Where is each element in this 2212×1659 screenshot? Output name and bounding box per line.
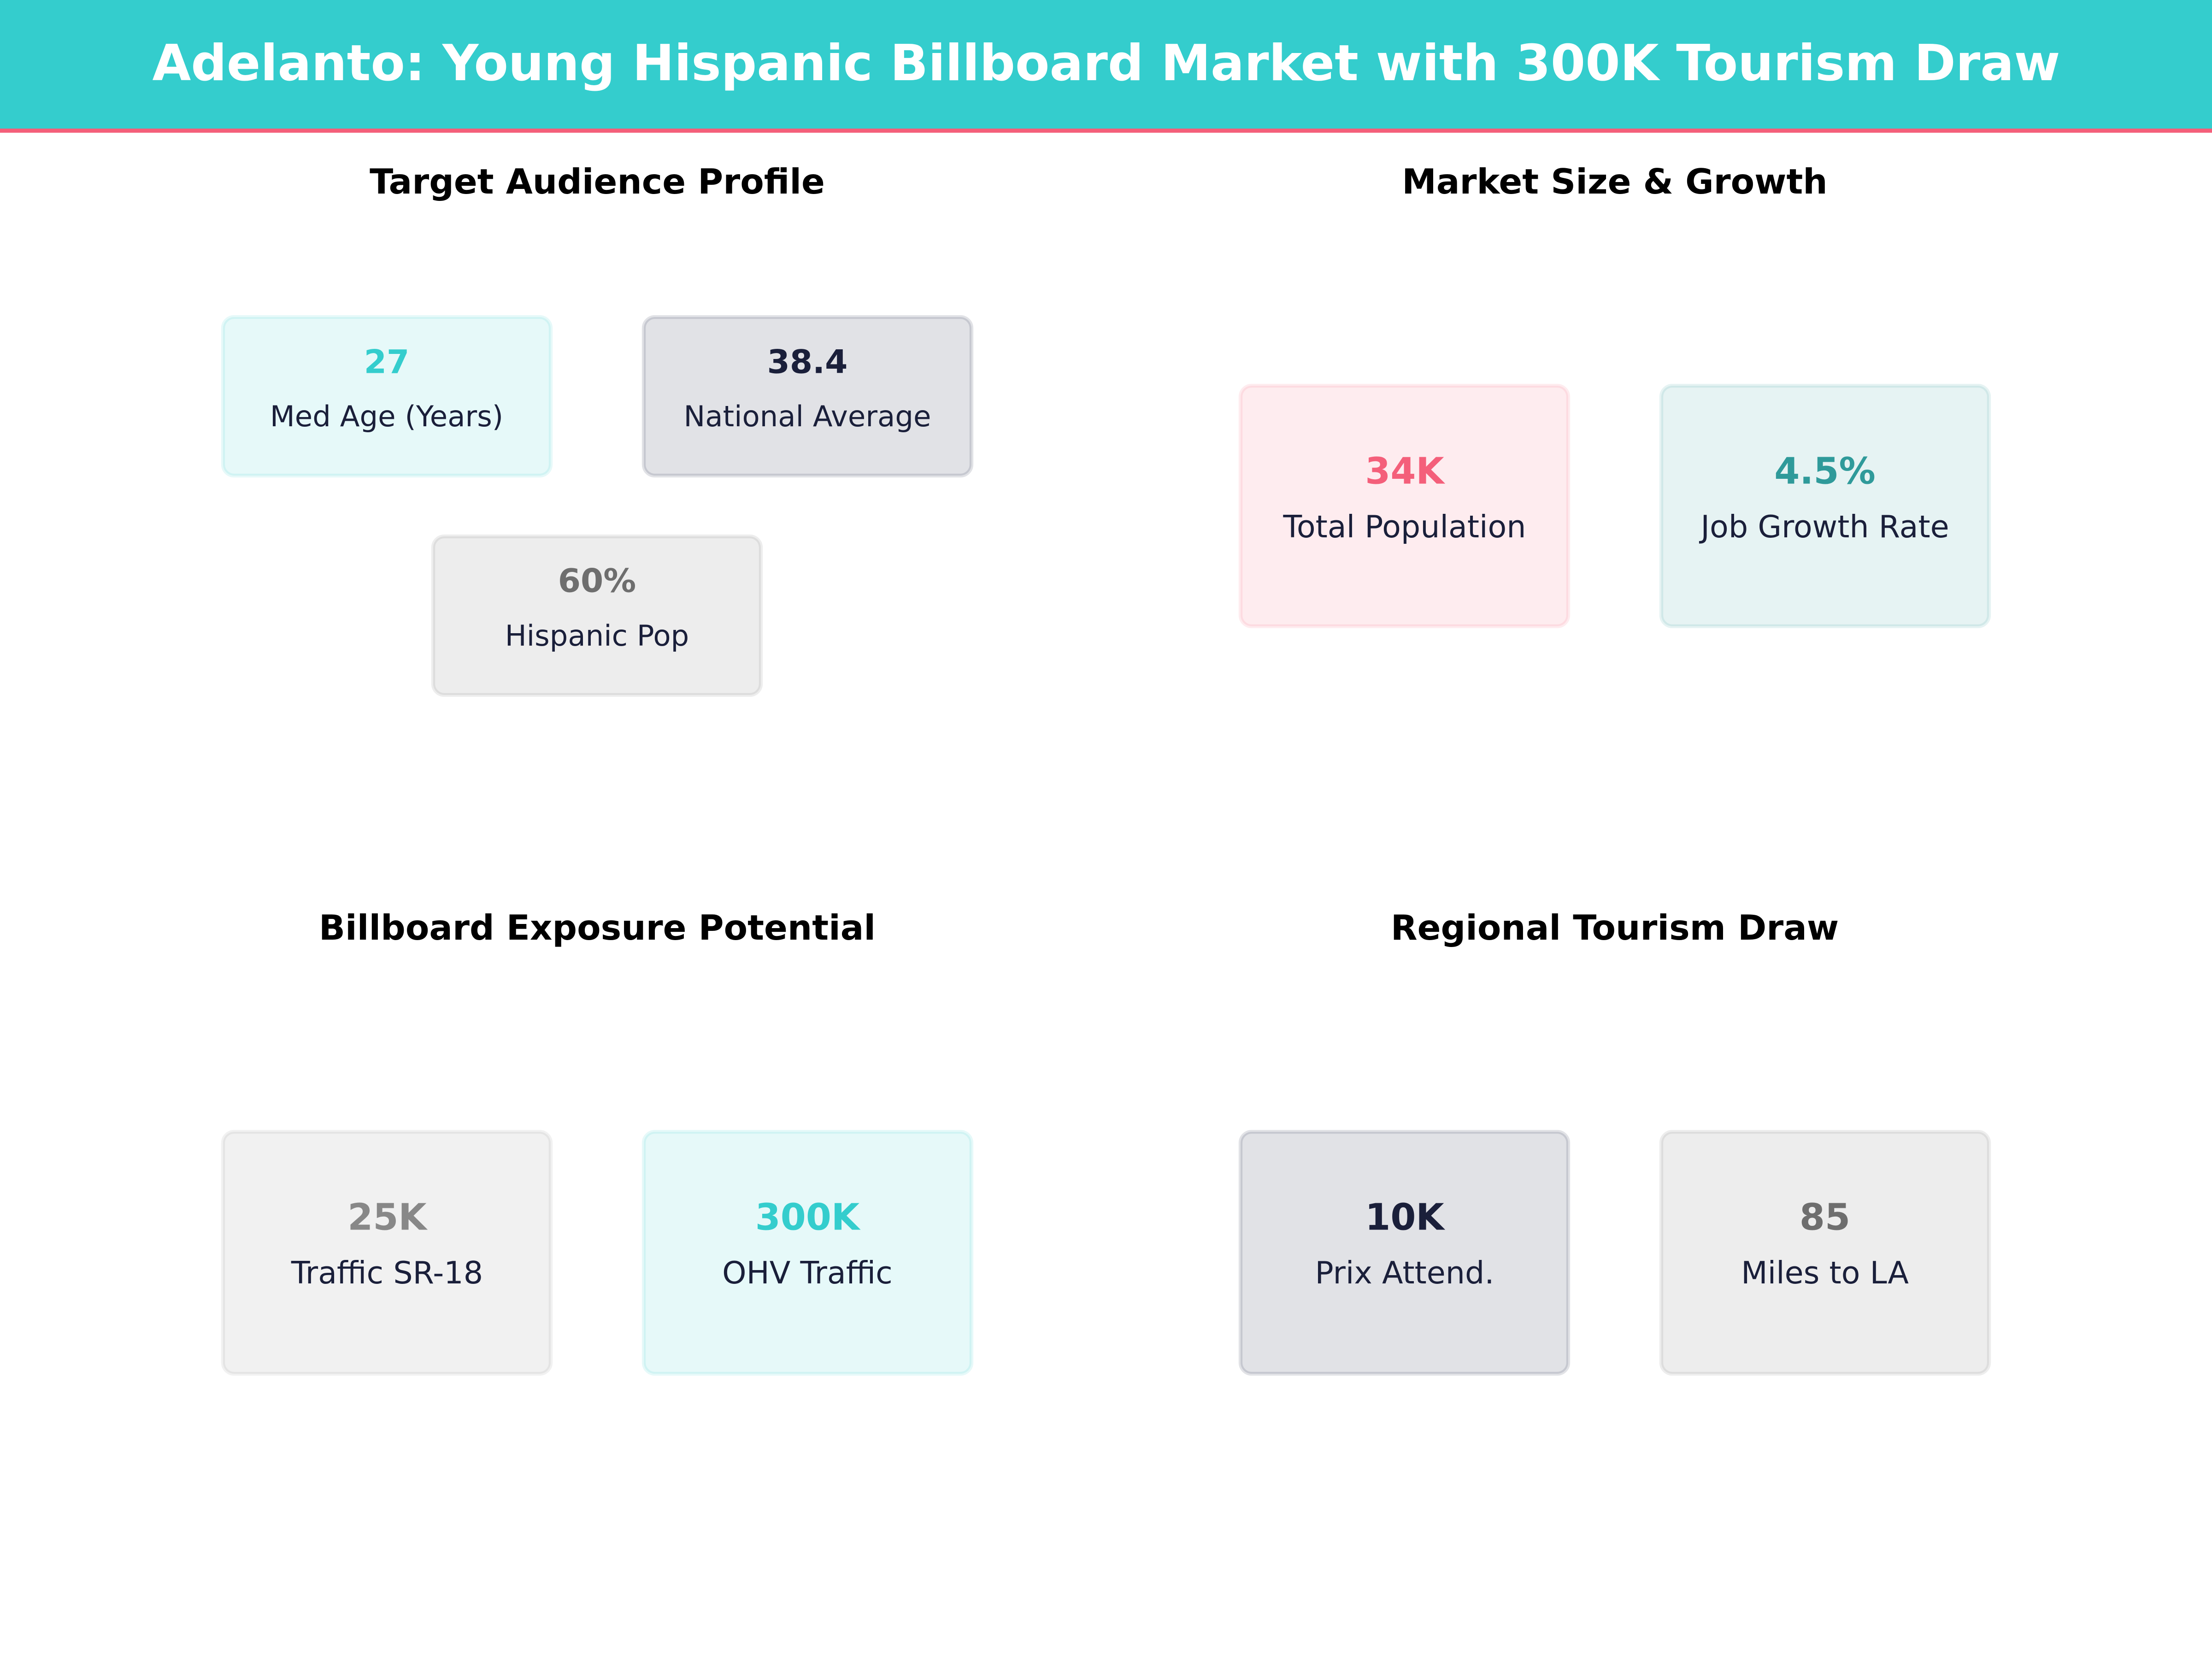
card: miles to LA (1661, 1132, 1989, 1374)
heading: target audience profile: Target Audience Profile (370, 161, 825, 202)
value: 300K (755, 1196, 861, 1239)
label: Job Growth Rate (1699, 509, 1949, 545)
card: prix attendance (1241, 1132, 1568, 1374)
panel: billboard exposure potential (223, 907, 971, 1374)
value: 60% (558, 561, 636, 600)
value: 34K (1365, 450, 1445, 492)
value: 27 (364, 343, 409, 381)
header banner (0, 0, 2212, 133)
heading: market size and growth: Market Size & Growth (1402, 161, 1828, 202)
card: national average (644, 317, 971, 476)
label: Hispanic Pop (505, 619, 689, 653)
label: Traffic SR-18 (291, 1255, 483, 1291)
label: Miles to LA (1741, 1255, 1909, 1291)
card: job growth rate (1661, 386, 1989, 626)
value: 4.5% (1774, 450, 1876, 492)
value: 25K (347, 1196, 428, 1239)
card: median age (223, 317, 551, 476)
card: traffic SR-18 (223, 1132, 551, 1374)
panel: regional tourism draw (1241, 907, 1989, 1374)
card: OHV traffic (644, 1132, 971, 1374)
label: National Average (684, 400, 931, 433)
value: 85 (1800, 1196, 1850, 1239)
card: total population (1241, 386, 1568, 626)
label: Total Population (1282, 509, 1526, 545)
value: 10K (1365, 1196, 1445, 1239)
panel: market size and growth (1241, 161, 1989, 626)
card: hispanic population (433, 536, 761, 695)
label: OHV Traffic (722, 1255, 893, 1291)
value: 38.4 (767, 343, 847, 381)
title: Adelanto: Young Hispanic Billboard Market with 300K Tourism Draw (153, 34, 2060, 92)
label: Med Age (Years) (270, 400, 503, 433)
panel: target audience profile (223, 161, 971, 695)
heading: regional tourism draw: Regional Tourism Draw (1391, 907, 1839, 948)
label: Prix Attend. (1315, 1255, 1494, 1291)
heading: billboard exposure potential: Billboard Exposure Potential (319, 907, 876, 948)
